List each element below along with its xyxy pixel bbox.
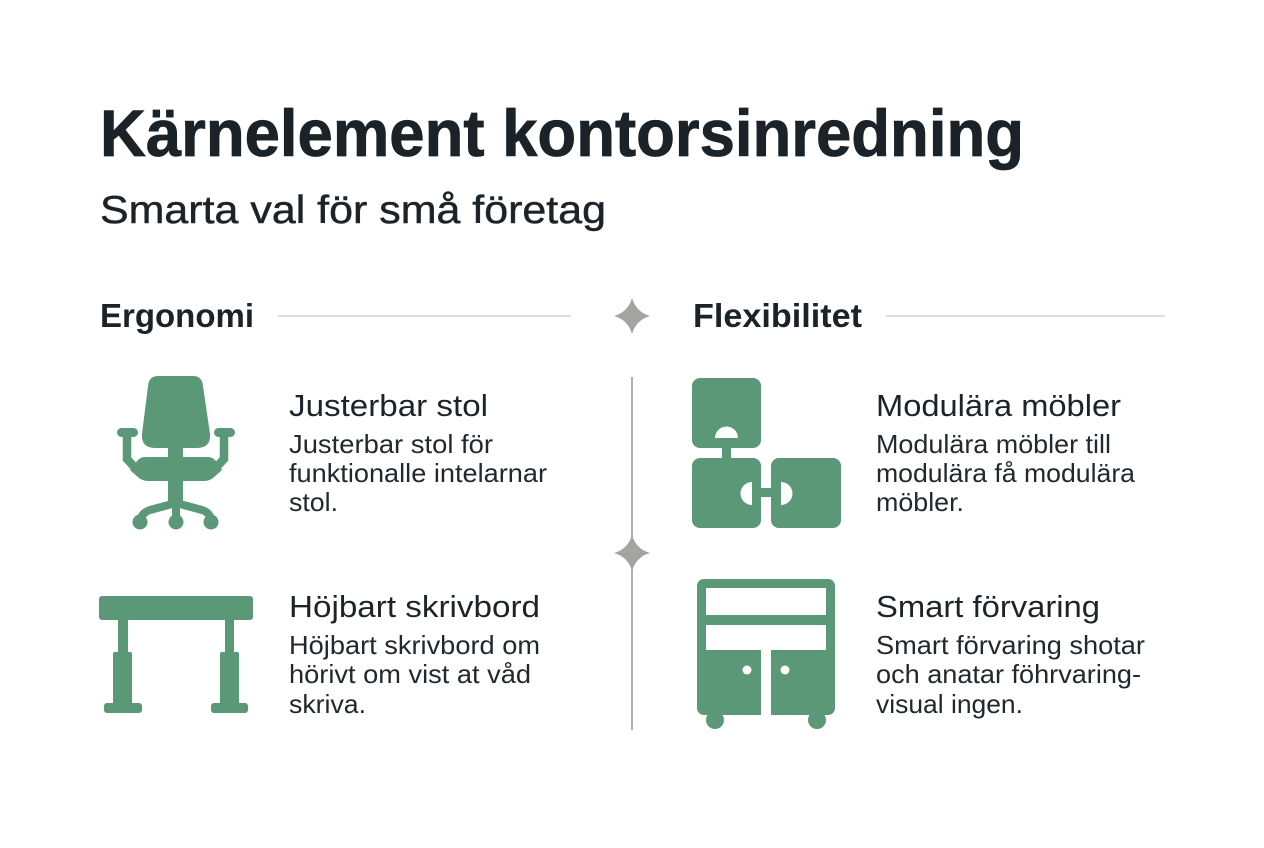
text: Höjbart skrivbord (289, 589, 540, 719)
text: Justerbar stol: Justerbar stol för (289, 429, 493, 459)
text: Justerbar stol (289, 388, 547, 517)
icon: top star divider (614, 298, 650, 334)
text: Smart förvaring: och anatar föhrvaring- (876, 659, 1141, 689)
icon: height-adjustable desk (99, 596, 253, 713)
text: Smart förvaring: visual ingen. (876, 689, 1023, 719)
vertical divider (631, 377, 633, 730)
text: Smart förvaring: Smart förvaring shotar (876, 630, 1145, 660)
icon: modular furniture (692, 378, 841, 528)
text: Modulära möbler: Modulära möbler till (876, 429, 1111, 459)
text: Höjbart skrivbord: Höjbart skrivbord om (289, 630, 540, 660)
text: Höjbart skrivbord: hörivt om vist at våd (289, 659, 531, 689)
text: Modulära möbler: möbler. (876, 487, 964, 517)
icon: adjustable chair (117, 376, 235, 530)
heading: Ergonomi: Ergonomi (100, 297, 254, 334)
icon: smart storage cabinet (697, 579, 835, 729)
text: Modulära möbler (876, 388, 1136, 517)
text: Smart förvaring: Smart förvaring (876, 589, 1100, 624)
text: Justerbar stol: stol. (289, 487, 338, 517)
text: Modulära möbler: Modulära möbler (876, 388, 1121, 423)
text: Modulära möbler: modulära få modulära (876, 458, 1136, 488)
icon: middle star divider (614, 535, 650, 571)
subtitle: Smarta val för små företag (100, 189, 606, 232)
text: Höjbart skrivbord: Höjbart skrivbord (289, 589, 540, 624)
text: Justerbar stol: Justerbar stol (289, 388, 488, 423)
heading: Flexibilitet: Flexibilitet (693, 297, 862, 334)
text: Smart förvaring (876, 589, 1145, 719)
title: Kärnelement kontorsinredning (100, 96, 1024, 170)
text: Justerbar stol: funktionalle intelarnar (289, 458, 547, 488)
text: Höjbart skrivbord: skriva. (289, 689, 366, 719)
